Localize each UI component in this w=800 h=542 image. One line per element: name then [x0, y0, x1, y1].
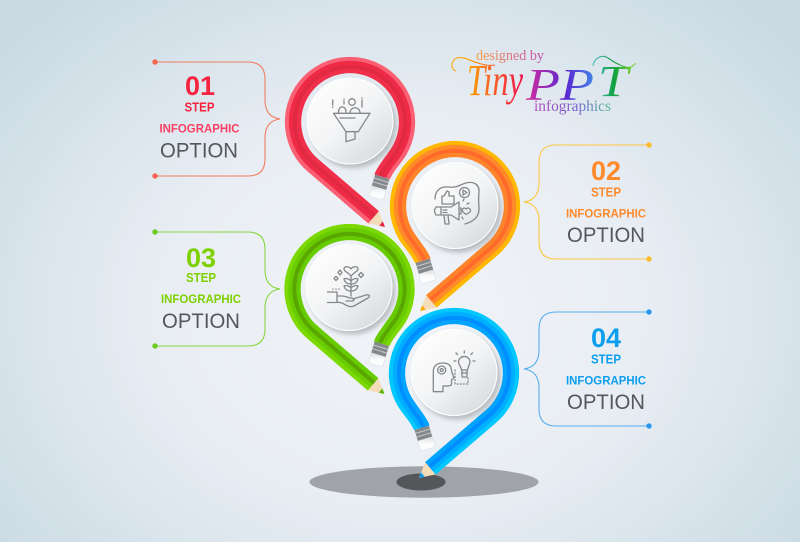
icon: plant in hand	[328, 267, 369, 307]
step 4 text: OPTION	[567, 391, 645, 414]
disc 2 with marketing icon	[412, 162, 498, 248]
icon: head with idea bulb	[433, 351, 475, 392]
step 2 text: 02	[591, 156, 621, 186]
step 1 text: INFOGRAPHIC	[160, 122, 240, 136]
disc 3 with plant in hand icon	[306, 244, 392, 330]
icon: megaphone	[434, 182, 479, 224]
logo: designed by	[476, 48, 545, 64]
step 3 text: OPTION	[162, 310, 240, 333]
step 1 text: OPTION	[160, 140, 238, 162]
logo	[452, 48, 636, 115]
step 4 text: 04	[591, 323, 621, 353]
step 4 text: STEP	[591, 352, 621, 366]
bracket 2	[524, 142, 652, 262]
panel: step 1 callout	[152, 59, 280, 179]
step 3 text: 03	[186, 243, 216, 273]
step 3 text: STEP	[186, 270, 216, 285]
logo: PP	[525, 59, 594, 110]
step 3 text: INFOGRAPHIC	[161, 292, 241, 306]
logo: infographics	[534, 98, 611, 115]
bracket 3	[152, 229, 280, 349]
ground shadow	[310, 466, 538, 498]
logo: Tiny	[467, 56, 523, 105]
bracket 1	[152, 59, 280, 179]
step 3 text	[161, 243, 241, 333]
step 1 text: STEP	[184, 100, 215, 114]
pencil pin 4: blue	[391, 310, 517, 478]
step 1 text	[160, 71, 240, 162]
disc 4 with head and bulb icon	[411, 330, 497, 416]
step 4 text: INFOGRAPHIC	[566, 374, 646, 388]
icon: funnel	[333, 98, 370, 142]
step 2 text: INFOGRAPHIC	[566, 206, 646, 220]
step 4 text	[566, 323, 646, 414]
panel: step 4 callout	[524, 309, 652, 429]
pencil pin 2: orange	[392, 143, 518, 311]
step 2 text	[566, 156, 646, 247]
step 2 text: STEP	[591, 184, 621, 200]
disc 1 with funnel icon	[307, 78, 393, 164]
step 1 text: 01	[185, 71, 215, 101]
bracket 4	[524, 309, 652, 429]
step 2 text: OPTION	[567, 224, 645, 247]
pencil pin 3: green	[287, 226, 413, 394]
panel: step 2 callout	[524, 142, 652, 262]
panel: step 3 callout	[152, 229, 280, 349]
logo: T	[598, 57, 632, 106]
pencil pin 1: red	[287, 59, 413, 227]
